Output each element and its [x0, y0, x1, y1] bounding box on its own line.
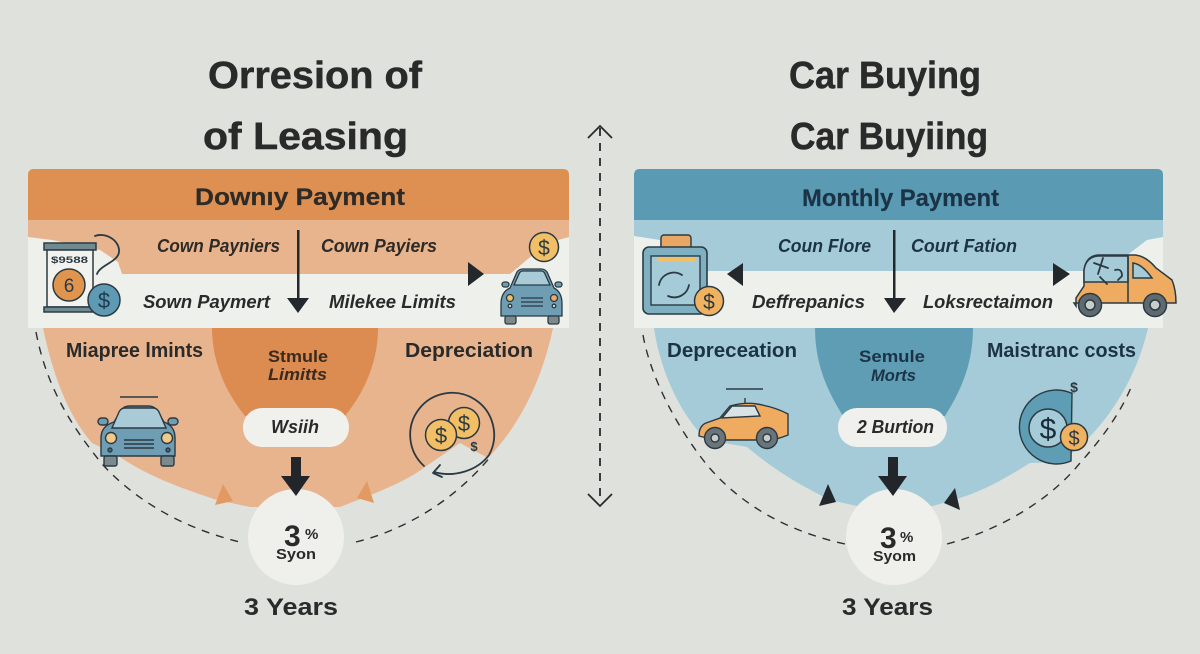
icon: car front (band) [501, 269, 562, 324]
label: Court Fation [911, 236, 1017, 256]
dashed arc left [36, 332, 240, 542]
stat: 3 [880, 522, 897, 555]
label: Milekee Limits [329, 292, 456, 312]
duration: 3 Years [244, 594, 338, 621]
header bar [28, 169, 569, 220]
panel: car buying [634, 169, 1176, 621]
pill [838, 408, 947, 447]
arrow: thick down [878, 457, 907, 496]
icon: maintenance coins: $ [1068, 428, 1080, 450]
label: Depreciation [405, 340, 533, 362]
center label: Stmule [268, 347, 328, 366]
icon: depreciation coins [410, 393, 494, 477]
header text: Downıy Payment [195, 184, 405, 211]
duration: 3 Years [842, 594, 933, 621]
label: Depreceation [667, 340, 797, 362]
dashed arc right [947, 385, 1132, 544]
label: Maistranc costs [987, 340, 1136, 362]
center dark segment [815, 328, 973, 416]
circle [248, 489, 344, 585]
icon: maintenance coins: $ [1040, 413, 1057, 446]
icon: clipboard [643, 235, 724, 316]
white strip [28, 236, 569, 328]
icon: document with coins: $9588 [51, 255, 88, 265]
icon: document with coins: $ [98, 288, 110, 313]
icon: coin over car [530, 232, 558, 262]
semicircle [654, 328, 1148, 506]
title: leasing [203, 55, 422, 158]
icon: side car [699, 389, 788, 448]
pill text: Wsiih [271, 417, 319, 437]
arrow: left triangle [727, 263, 743, 286]
title: leasing: of Leasing [203, 116, 408, 158]
arrow: thick down [281, 457, 310, 496]
title: car buying [789, 55, 988, 158]
arrow: down [884, 230, 906, 313]
stat: % [900, 529, 913, 546]
stat [873, 522, 916, 565]
icon: clipboard: $ [703, 291, 715, 314]
dashed arc left [643, 335, 845, 544]
icon: depreciation coins: $ [458, 411, 470, 436]
label: Miapree lmints [66, 340, 203, 362]
small orange triangles [215, 481, 374, 505]
pill text: 2 Burtion [856, 417, 934, 437]
icon: depreciation coins: $ [435, 423, 447, 448]
icon: maintenance coins [1019, 379, 1088, 464]
center label [859, 347, 925, 385]
stat: Syom [873, 548, 916, 565]
icon: document with coins [44, 235, 120, 316]
pill [243, 408, 349, 447]
icon: document with coins: 6 [64, 276, 74, 297]
header text: Monthly Payment [802, 185, 999, 212]
center label: Semule [859, 347, 925, 366]
blue band [634, 220, 1163, 271]
icon: coin over car: $ [538, 237, 550, 260]
icon: depreciation coins: $ [470, 439, 478, 454]
center label: Limitts [268, 365, 327, 384]
label: Deffrepanics [752, 292, 865, 312]
title: leasing: Orresion of [208, 55, 422, 97]
label: Sown Paymert [143, 292, 271, 312]
label: Cown Payiers [321, 236, 437, 256]
stat: Syon [276, 546, 316, 563]
dashed arc right [356, 456, 491, 542]
icon: maintenance coins: $ [1070, 379, 1078, 395]
center dark segment [212, 328, 378, 416]
title: car buying: Car Buying [789, 55, 981, 97]
panel: leasing [28, 169, 569, 621]
semicircle [43, 328, 553, 507]
center label: Morts [871, 366, 916, 385]
label: Coun Flore [778, 236, 871, 256]
icon: van [1074, 255, 1176, 316]
label: Loksrectaimon [923, 292, 1053, 312]
peach band [28, 220, 569, 274]
stat: % [305, 526, 318, 543]
label: Cown Payniers [157, 236, 280, 256]
white strip [634, 236, 1163, 328]
title: car buying: Car Buyiing [790, 116, 988, 158]
arrow: central dashed double arrow [588, 126, 612, 506]
arrow: down [287, 230, 309, 313]
icon: car front (lower) [98, 397, 178, 466]
arrow: right triangle [468, 262, 484, 286]
center label [268, 347, 328, 384]
stat: 3 [284, 520, 301, 553]
stat [276, 520, 318, 563]
arrow: right triangle [1053, 263, 1070, 286]
small dark triangles [819, 484, 960, 510]
header bar [634, 169, 1163, 220]
circle [846, 489, 942, 585]
